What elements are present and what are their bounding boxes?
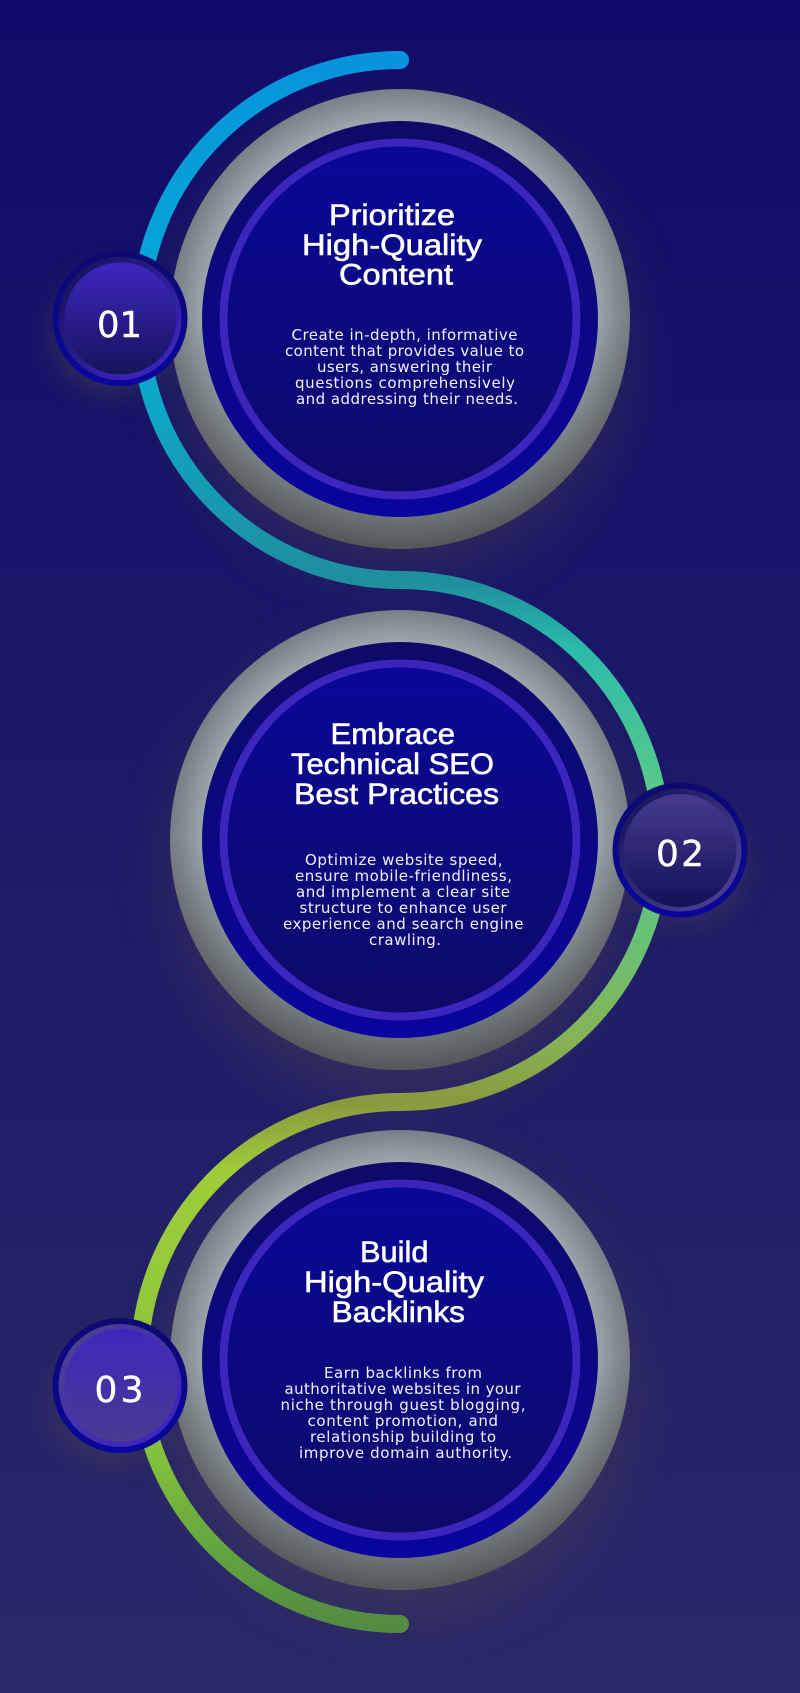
step 3 description: niche through guest blogging, — [280, 1396, 526, 1414]
badge: 02: 02 — [656, 834, 704, 875]
step 3 description: authoritative websites in your — [284, 1380, 521, 1398]
step 2 description: crawling. — [369, 931, 441, 949]
glows under circles — [52, 115, 748, 1616]
step 1 description: Create in-depth, informative — [292, 326, 518, 344]
step 3 heading — [304, 1236, 484, 1329]
step 2 heading: Embrace — [330, 718, 455, 751]
step 2 grey ring — [170, 610, 630, 1070]
step 1 heading: Content — [339, 258, 454, 292]
step 1 description: content that provides value to — [285, 342, 524, 360]
step 2 description: structure to enhance user — [300, 899, 507, 917]
step 2 description — [283, 851, 524, 949]
step 3 inner disc — [224, 1184, 576, 1536]
step 1 heading: Prioritize — [329, 199, 455, 232]
step 1 description: users, answering their — [317, 358, 493, 376]
step 3 heading: Backlinks — [332, 1296, 465, 1329]
connecting S-curve arc — [139, 60, 661, 1624]
step 1 dark disc — [202, 121, 598, 517]
step 2 inner disc — [224, 664, 576, 1016]
step 3 description: improve domain authority. — [299, 1444, 512, 1462]
badge: 01: 01 — [97, 305, 142, 346]
step 1 description: and addressing their needs. — [296, 390, 518, 408]
step 2 description: experience and search engine — [283, 915, 524, 933]
step 3 grey ring — [170, 1130, 630, 1590]
step 1 inner disc — [224, 142, 576, 496]
step 3 description: Earn backlinks from — [324, 1364, 482, 1382]
step 2 description: Optimize website speed, — [305, 851, 502, 869]
step 1 heading: High-Quality — [302, 229, 482, 262]
step 2 description: and implement a clear site — [296, 883, 510, 901]
badge: 01 — [52, 251, 188, 386]
step 3 heading: Build — [360, 1236, 428, 1269]
step 3 dark disc — [202, 1162, 598, 1558]
step 3 description — [280, 1364, 526, 1462]
step 3 description: content promotion, and — [308, 1412, 498, 1430]
step 2 heading: Technical SEO — [291, 748, 494, 781]
panel: step 2 circle — [170, 610, 630, 1070]
step 1 description: questions comprehensively — [295, 374, 515, 392]
badge: 03: 03 — [94, 1370, 144, 1411]
step 2 dark disc — [202, 642, 598, 1038]
badge: 03 — [52, 1318, 188, 1453]
step 2 heading — [291, 718, 499, 811]
step 1 description — [285, 326, 524, 408]
step 1 grey ring — [170, 89, 630, 549]
step 3 description: relationship building to — [310, 1428, 496, 1446]
step 2 description: ensure mobile-friendliness, — [295, 867, 512, 885]
panel: step 1 circle — [170, 89, 630, 549]
step 1 heading — [302, 199, 482, 292]
panel: step 3 circle — [170, 1130, 630, 1590]
step 3 heading: High-Quality — [304, 1266, 484, 1299]
step 2 heading: Best Practices — [294, 778, 499, 811]
badge: 02 — [612, 782, 748, 918]
